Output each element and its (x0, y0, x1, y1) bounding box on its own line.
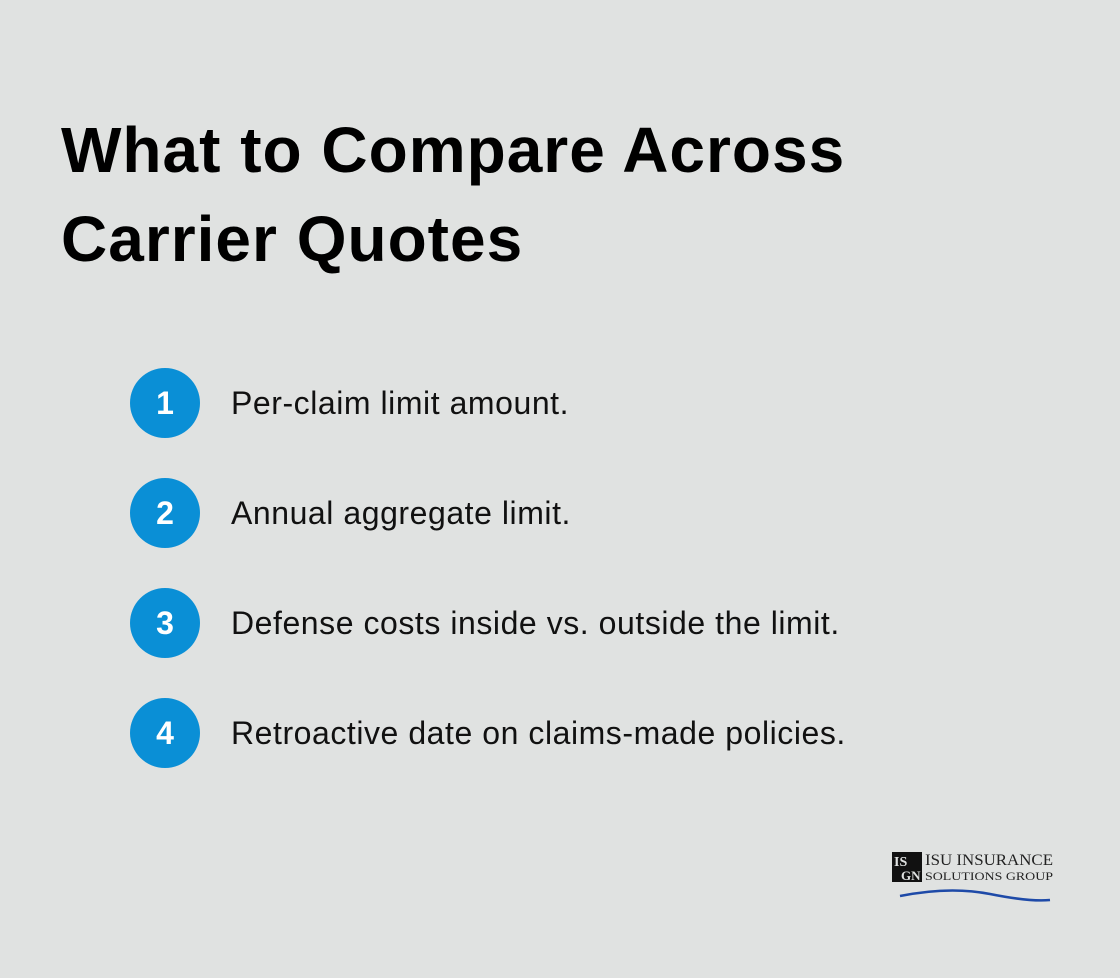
item 2: 2 (156, 495, 174, 531)
title: What to Compare Across (61, 114, 845, 186)
item 2 (130, 478, 571, 548)
item 2: Annual aggregate limit. (231, 495, 571, 531)
item 4 (130, 698, 846, 768)
item 4: 4 (156, 715, 174, 751)
item 3: 3 (156, 605, 174, 641)
logo: ISU INSURANCE (925, 852, 1053, 869)
item 4: Retroactive date on claims-made policies. (231, 715, 846, 751)
item 1: Per-claim limit amount. (231, 385, 569, 421)
title (61, 114, 845, 275)
item 1 (130, 368, 569, 438)
item 3: Defense costs inside vs. outside the limit. (231, 605, 840, 641)
item 3 (130, 588, 840, 658)
logo: SOLUTIONS GROUP (925, 869, 1053, 883)
logo: IS (894, 855, 907, 870)
title: Carrier Quotes (61, 203, 523, 275)
logo: GN (901, 868, 921, 883)
item 1: 1 (156, 385, 174, 421)
logo (892, 852, 1053, 902)
